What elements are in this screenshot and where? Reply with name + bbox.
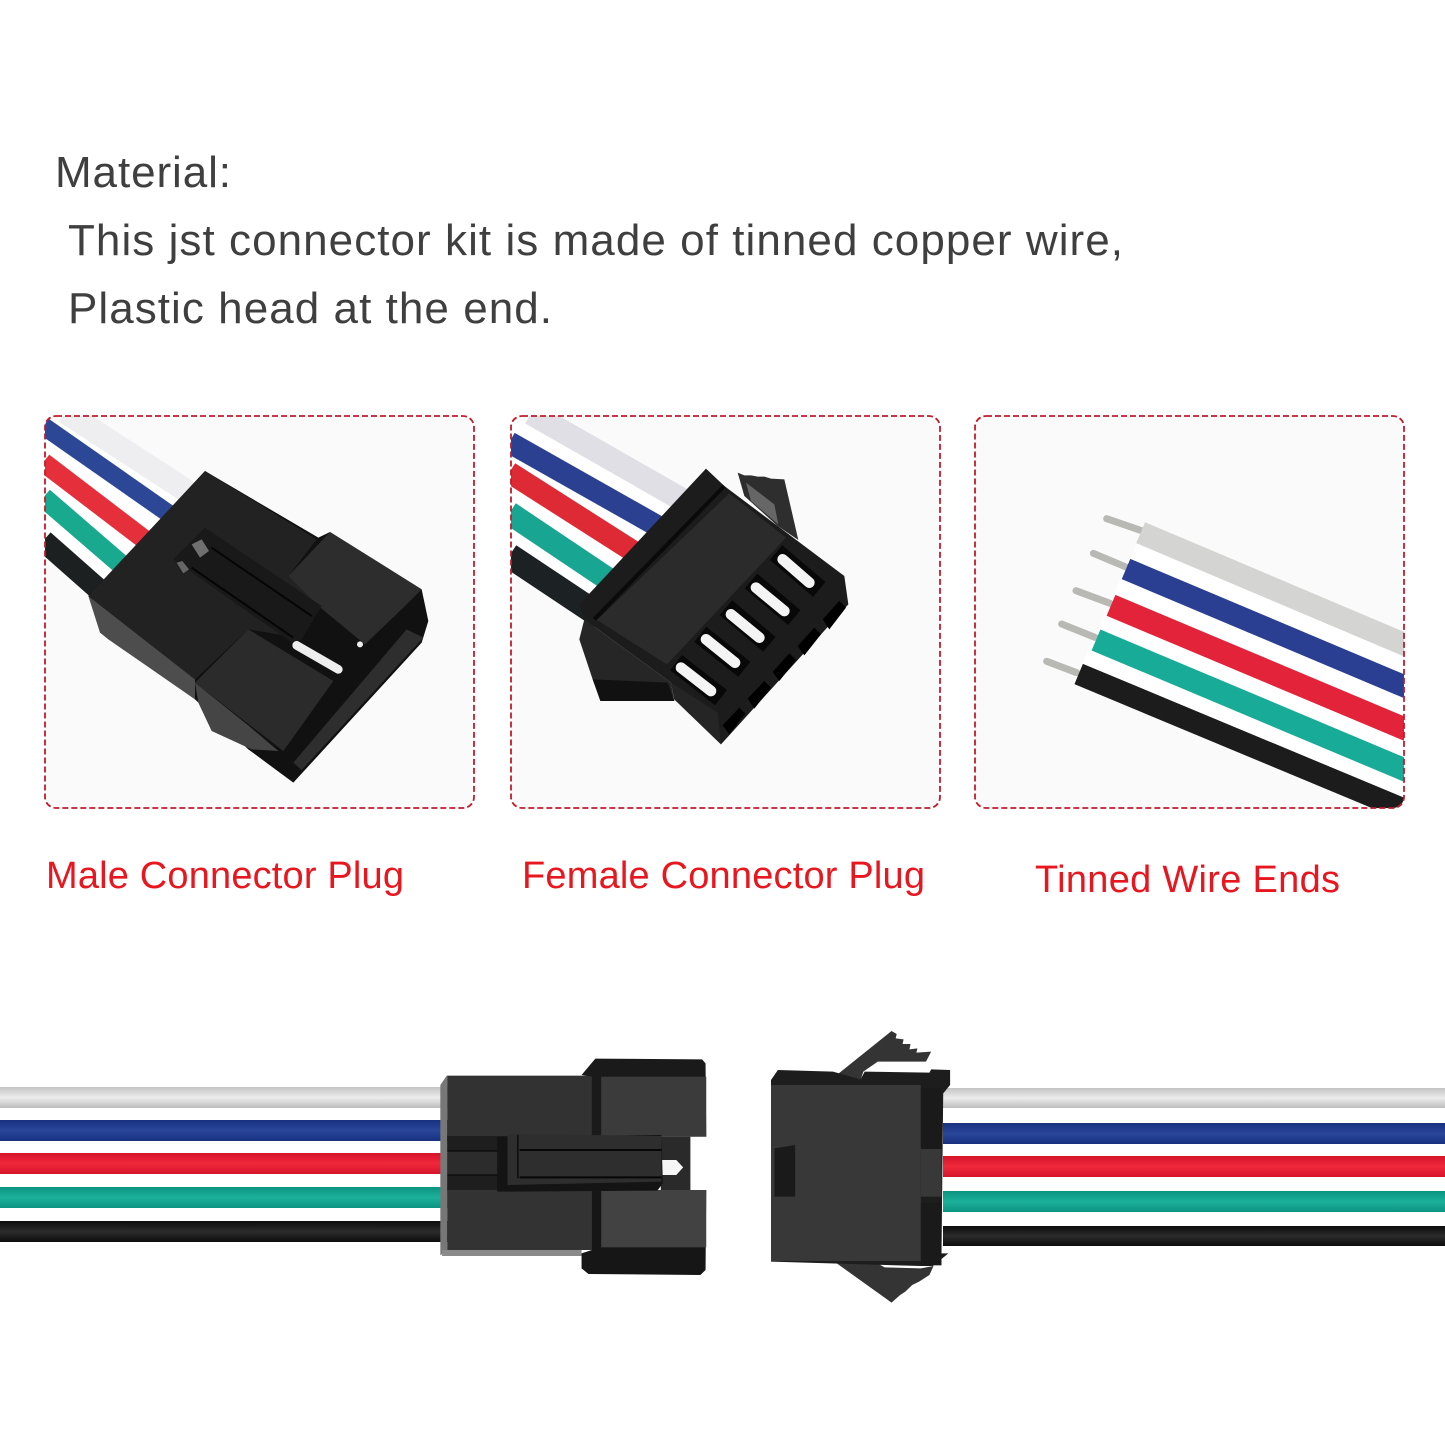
panel captions	[46, 855, 1340, 901]
upper latch	[831, 1031, 931, 1080]
panel: male connector plug	[45, 416, 428, 783]
panel captions: Male Connector Plug	[46, 855, 404, 897]
wire gap backing	[1073, 543, 1407, 800]
front slot and metal pin	[661, 1137, 690, 1190]
panel: female connector plug	[511, 416, 848, 744]
lower flap	[195, 629, 333, 751]
panel: tinned wire ends	[1043, 515, 1404, 808]
right wire bundle	[943, 1088, 1445, 1246]
lower flap	[582, 1190, 706, 1275]
main face	[771, 1085, 921, 1261]
heading and material description: This jst connector kit is made of tinned copper wire,	[68, 216, 1123, 265]
lower body	[447, 1190, 593, 1250]
heading and material description: Plastic head at the end.	[68, 284, 552, 333]
dashed panel outlines	[45, 416, 1404, 808]
plug base	[88, 471, 428, 783]
lower latch	[833, 1261, 934, 1303]
panel captions: Tinned Wire Ends	[1035, 859, 1340, 901]
right clips	[921, 1088, 941, 1265]
socket slots and pins	[676, 553, 819, 698]
front rail highlight	[293, 629, 423, 770]
body rim	[771, 1069, 950, 1266]
panel captions: Female Connector Plug	[522, 855, 925, 897]
heading and material description: Material:	[55, 148, 231, 197]
locking latch	[173, 528, 322, 643]
side view female connector	[771, 1031, 950, 1303]
upper latch	[738, 473, 798, 540]
lower windows	[723, 601, 846, 734]
side view male connector	[440, 1059, 706, 1275]
infographic canvas	[0, 156, 1445, 1303]
wires	[45, 416, 194, 596]
coloured wires	[1079, 533, 1408, 811]
heading and material description	[55, 148, 1123, 333]
left wire bundle	[0, 1087, 448, 1242]
upper flap	[288, 532, 422, 644]
lower side wall	[88, 596, 195, 699]
plug body	[579, 469, 848, 744]
lower latch	[579, 619, 674, 701]
middle strip	[447, 1136, 509, 1190]
wires	[509, 413, 694, 617]
locking latch	[497, 1134, 663, 1192]
metal pin	[297, 645, 338, 669]
upper body	[447, 1076, 593, 1136]
side notch	[774, 1145, 795, 1197]
top face	[88, 471, 322, 679]
bare tinned tips	[1047, 519, 1142, 673]
upper flap	[582, 1059, 706, 1137]
